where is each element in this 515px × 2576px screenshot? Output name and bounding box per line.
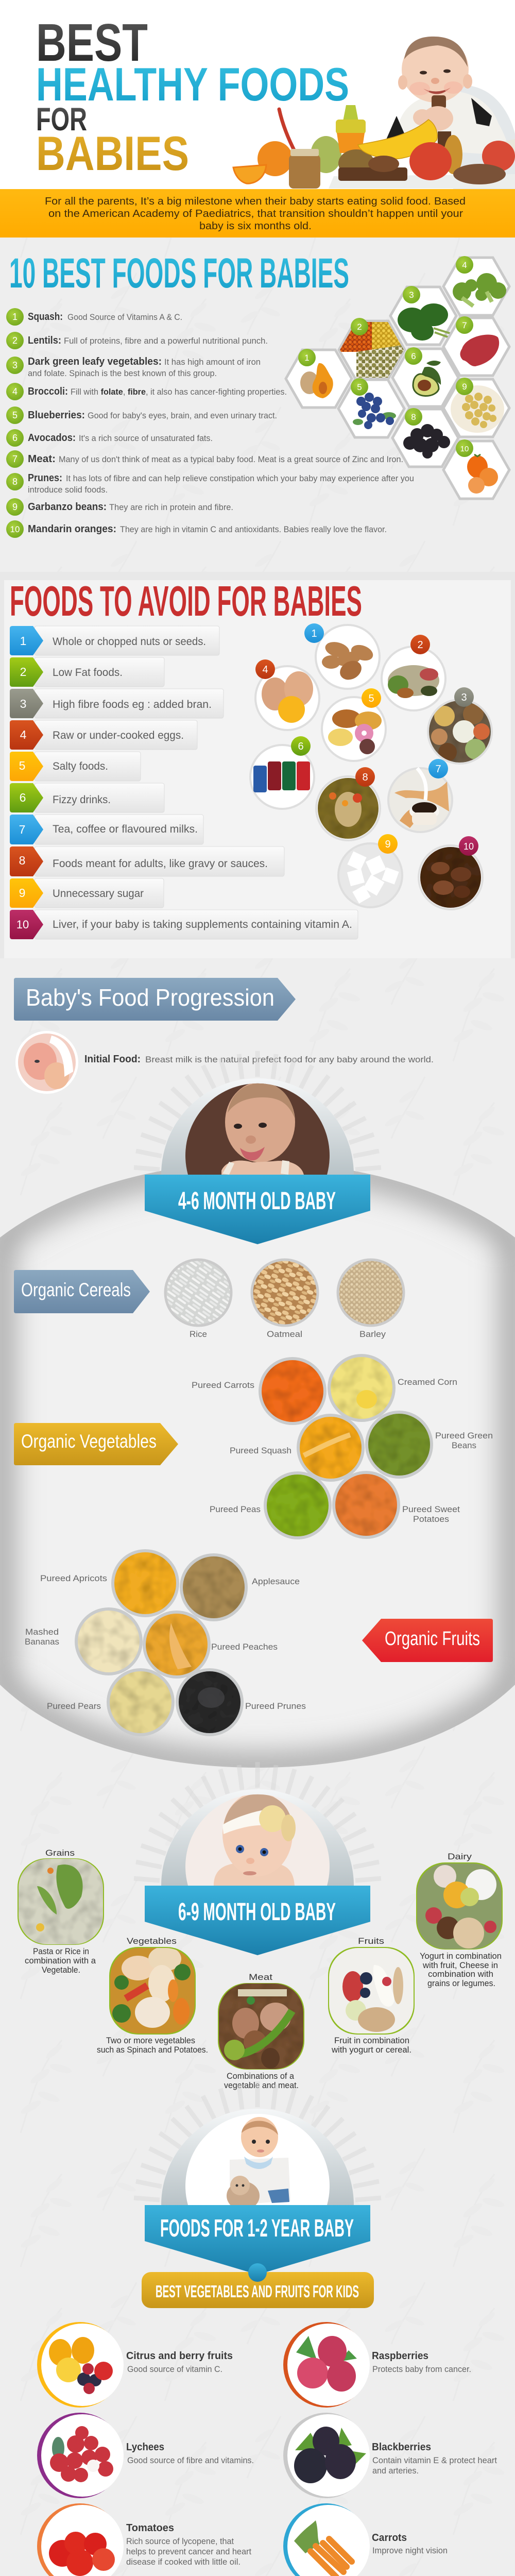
- list item 5: Salty foods.: [53, 760, 108, 772]
- icon: bread slice: [453, 164, 506, 184]
- hexagon 7: meat: 7: [462, 320, 467, 330]
- ribbon: organic cereals: [14, 1270, 150, 1313]
- ribbon: organic cereals: Organic Cereals: [21, 1279, 131, 1300]
- photo: high fibre foods: 3: [461, 692, 467, 703]
- photo: sugar cubes: [338, 834, 402, 907]
- list item 8: introduce solid foods.: [28, 485, 108, 495]
- panel: header: [0, 0, 515, 189]
- list item 3: [6, 356, 261, 378]
- list item 1: [6, 308, 182, 326]
- card: dairy: grains or legumes.: [427, 1978, 495, 1988]
- food: citrus and berry fruits: Good source of vitamin C.: [127, 2364, 222, 2374]
- photo: high fibre foods: [428, 687, 492, 764]
- photo: almonds: [304, 623, 380, 689]
- list item 3: High fibre foods eg : added bran.: [53, 699, 212, 710]
- hexagon 5: blueberries: 5: [357, 382, 362, 392]
- food: tomatoes: [37, 2503, 251, 2576]
- list item 7: Many of us don't think of meat as a typical baby food. Meat is a great source of Zinc and Iron.: [59, 454, 403, 464]
- list item 10: They are high in vitamin C and antioxidants. Babies really love the flavor.: [120, 524, 387, 534]
- hexagon 1: squash: [286, 349, 352, 408]
- list item 8: 8: [19, 854, 25, 867]
- icon: orange: [258, 141, 293, 176]
- list item 4: [10, 720, 197, 750]
- icon: bread: [338, 167, 407, 181]
- list item 6: 6: [20, 791, 26, 804]
- baby 4-6 month medallion: [134, 1051, 381, 1175]
- photo: salty foods: 5: [368, 693, 374, 704]
- list item 1: Good Source of Vitamins A & C.: [67, 312, 182, 322]
- card: meat: [218, 1972, 304, 2090]
- photo: almonds: 1: [311, 628, 317, 639]
- list item 1: 1: [12, 312, 18, 322]
- list item 6: [10, 783, 164, 812]
- list item 7: [10, 815, 203, 844]
- title: BEST: [36, 13, 148, 72]
- icon: baby food jar: [289, 149, 320, 189]
- list item 5: [10, 752, 141, 781]
- ribbon: 4-6 month old baby: 4-6 MONTH OLD BABY: [178, 1188, 336, 1215]
- list item 10: 10: [16, 918, 29, 931]
- photo: low fat foods: 2: [417, 639, 423, 651]
- pureed sweet potatoes: Potatoes: [413, 1514, 449, 1524]
- card: vegetables: such as Spinach and Potatoes.: [97, 2045, 208, 2055]
- photo: barley: Barley: [359, 1329, 386, 1339]
- ribbon: organic vegetables: [14, 1423, 178, 1465]
- list item 1: Whole or chopped nuts or seeds.: [53, 636, 206, 648]
- list item 6: Fizzy drinks.: [53, 794, 111, 806]
- hexagon 8: prunes: [392, 408, 458, 467]
- list item 8: Foods meant for adults, like gravy or sauces.: [53, 858, 268, 870]
- list item 9: 9: [12, 502, 18, 512]
- card: fruits: Fruits: [358, 1936, 384, 1946]
- card: vegetables: Two or more vegetables: [106, 2036, 195, 2045]
- heading ribbon: baby's food progression: Baby's Food Progression: [26, 984, 274, 1011]
- hexagon 5: blueberries: [338, 378, 404, 437]
- list item 8: 8: [12, 477, 18, 487]
- icon: orange slice: [233, 165, 266, 183]
- food: tomatoes: disease if cooked with little oil.: [126, 2557, 241, 2567]
- photo: baby with food: [233, 37, 515, 189]
- pureed carrots: Pureed Carrots: [192, 1380, 254, 1390]
- list item 8: [10, 846, 284, 876]
- heading ribbon: baby's food progression: [14, 978, 296, 1021]
- pureed carrots: [192, 1357, 327, 1425]
- pureed apricots: [40, 1549, 179, 1617]
- card: grains: Grains: [45, 1848, 75, 1858]
- list item 8: [6, 472, 414, 495]
- creamed corn: Creamed Corn: [398, 1377, 457, 1387]
- card: meat: Combinations of a: [227, 2071, 295, 2081]
- panel: 10 best foods: [6, 250, 509, 538]
- list item 3: 3: [20, 697, 26, 710]
- list item 5: Blueberries:: [28, 410, 85, 421]
- panel: intro band: [0, 189, 515, 238]
- list item 1: [10, 626, 219, 655]
- food: tomatoes: Rich source of lycopene, that: [126, 2536, 234, 2546]
- photo: rice: Rice: [190, 1329, 207, 1339]
- list item 9: They are rich in protein and fibre.: [109, 502, 233, 512]
- mashed bananas: [25, 1607, 143, 1675]
- panel: intro band: baby is six months old.: [199, 221, 312, 232]
- list item 2: Lentils:: [28, 335, 61, 346]
- card: dairy: [416, 1852, 503, 1988]
- hexagon 4: broccoli: [443, 256, 509, 315]
- list item 9: Unnecessary sugar: [53, 888, 144, 900]
- food: raspberries: [283, 2322, 471, 2408]
- list item 4: [6, 383, 287, 400]
- food: carrots: Improve night vision: [372, 2546, 448, 2555]
- list item 9: [6, 498, 233, 516]
- list item 7: Tea, coffee or flavoured milks.: [53, 823, 198, 835]
- photo: sugar cubes: 9: [385, 839, 391, 850]
- hexagon 3: leafy greens: 3: [409, 290, 414, 300]
- photo: raw eggs: 4: [262, 664, 268, 675]
- hexagon 7: meat: [443, 316, 509, 376]
- photo: nursing baby: [15, 1031, 78, 1094]
- card: dairy: Dairy: [448, 1852, 472, 1861]
- title: FOR: [36, 101, 87, 138]
- list item 5: 5: [12, 410, 18, 420]
- ribbon: 4-6 month old baby: [145, 1175, 370, 1244]
- banner: best vegetables and fruits for kids: [142, 2263, 374, 2308]
- photo: barley: [338, 1260, 404, 1339]
- list item 4: 4: [20, 728, 27, 741]
- pureed sweet potatoes: [332, 1471, 460, 1539]
- icon: red apple right: [482, 141, 515, 172]
- photo: oatmeal: [252, 1260, 318, 1339]
- card: fruits: Fruit in combination: [334, 2036, 409, 2045]
- ribbon: 6-9 month old baby: [145, 1886, 370, 1955]
- list item 2: [6, 332, 268, 349]
- list item 9: 9: [19, 886, 25, 900]
- list item 2: Full of proteins, fibre and a powerful nutritional punch.: [64, 336, 268, 346]
- list item 10: [6, 520, 387, 538]
- pureed peas: [210, 1471, 332, 1539]
- photo: oatmeal: Oatmeal: [267, 1329, 302, 1339]
- applesauce: Applesauce: [252, 1577, 300, 1586]
- list item 9: Garbanzo beans:: [28, 501, 107, 513]
- initial food: Initial Food:: [84, 1054, 141, 1065]
- list item 10: [10, 910, 358, 939]
- photo: liver: [419, 836, 483, 909]
- title: [36, 13, 349, 180]
- icon: green apple: [311, 136, 341, 173]
- list item 3: It has high amount of iron: [164, 357, 261, 367]
- food: raspberries: Raspberries: [372, 2350, 428, 2362]
- photo: smiling baby: [185, 1082, 330, 1175]
- card: grains: [18, 1848, 104, 1975]
- initial food: [15, 1031, 434, 1094]
- card: fruits: [328, 1936, 415, 2055]
- list item 2: 2: [20, 665, 26, 679]
- ribbon: organic fruits: [362, 1619, 493, 1662]
- food: blackberries: Contain vitamin E & protect heart: [372, 2455, 497, 2465]
- list item 2: [10, 657, 164, 687]
- food: lychees: Lychees: [126, 2442, 164, 2453]
- pureed green beans: [365, 1411, 493, 1479]
- list item 2: Low Fat foods.: [53, 667, 123, 679]
- pureed prunes: Pureed Prunes: [245, 1701, 306, 1711]
- banner: best vegetables and fruits for kids: BEST VEGETABLES AND FRUITS FOR KIDS: [156, 2282, 359, 2301]
- ribbon: 6-9 month old baby: 6-9 MONTH OLD BABY: [178, 1899, 336, 1926]
- card: grains: combination with a: [25, 1956, 96, 1965]
- food: citrus and berry fruits: [37, 2322, 233, 2408]
- photo: fizzy drink cans: 6: [298, 741, 304, 752]
- photo: coffee with milk: 7: [435, 764, 441, 775]
- initial food: Breast milk is the natural prefect food for any baby around the world.: [145, 1055, 434, 1064]
- icon: tray: [329, 174, 515, 189]
- list item 1: Squash:: [28, 311, 63, 323]
- title: HEALTHY FOODS: [36, 59, 349, 111]
- list item 2: 2: [12, 335, 18, 346]
- hexagon 9: garbanzo beans: 9: [462, 382, 467, 392]
- creamed corn: [328, 1354, 457, 1422]
- list item 7: Meat:: [28, 453, 56, 465]
- hexagon 6: avocado: 6: [411, 351, 416, 361]
- card: dairy: Yogurt in combination: [420, 1951, 502, 1961]
- panel: intro band: For all the parents, It’s a big milestone when their baby starts eating solid food. Based: [45, 196, 466, 207]
- panel: big circle background: [0, 1162, 515, 1768]
- pureed pears: [47, 1668, 175, 1736]
- title: BABIES: [36, 126, 189, 180]
- hexagon 6: avocado: [392, 347, 458, 406]
- hexagon 3: leafy greens: [390, 286, 456, 345]
- hexagon 9: garbanzo beans: [443, 378, 509, 437]
- photo: fizzy drink cans: [250, 736, 314, 809]
- list item 9: [10, 878, 164, 908]
- list item 7: 7: [19, 823, 25, 836]
- food: carrots: Carrots: [372, 2532, 407, 2544]
- card: fruits: with yogurt or cereal.: [331, 2045, 411, 2055]
- card: meat: vegetable and meat.: [224, 2080, 299, 2090]
- food: carrots: [283, 2503, 448, 2576]
- applesauce: [180, 1553, 300, 1621]
- photo: coffee with milk: [388, 759, 452, 832]
- list item 8: Prunes:: [28, 472, 62, 484]
- photo: baby with headband: [185, 1792, 330, 1886]
- photo: gravy: 8: [362, 772, 368, 783]
- pureed green beans: Beans: [452, 1440, 476, 1450]
- mashed bananas: Bananas: [25, 1637, 59, 1647]
- list item 5: [6, 406, 277, 424]
- photo: salty foods: [322, 688, 386, 761]
- ribbon: foods for 1-2 year baby: [145, 2205, 370, 2275]
- list item 7: 7: [12, 454, 18, 464]
- list item 10: 10: [10, 524, 20, 534]
- list item 4: Broccoli:: [28, 386, 68, 397]
- pureed green beans: Pureed Green: [435, 1431, 493, 1440]
- mashed bananas: Mashed: [25, 1627, 59, 1637]
- list item 4: Raw or under-cooked eggs.: [53, 730, 184, 741]
- ribbon: foods for 1-2 year baby: FOODS FOR 1-2 YEAR BABY: [160, 2215, 354, 2242]
- food: tomatoes: Tomatoes: [126, 2522, 174, 2534]
- hexagon 8: prunes: 8: [411, 412, 416, 422]
- list item 6: It's a rich source of unsaturated fats.: [79, 433, 213, 443]
- list item 3: [10, 689, 224, 718]
- pureed pears: Pureed Pears: [47, 1701, 101, 1711]
- hexagon 2: lentils: 2: [357, 322, 362, 332]
- ribbon: organic fruits: Organic Fruits: [385, 1628, 480, 1650]
- food: citrus and berry fruits: Citrus and berry fruits: [126, 2350, 233, 2362]
- panel: intro band: on the American Academy of Paediatrics, that transition shouldn’t happen until your: [48, 208, 463, 219]
- food: tomatoes: helps to prevent cancer and heart: [126, 2547, 251, 2556]
- pureed squash: Pureed Squash: [230, 1446, 291, 1455]
- pureed peas: Pureed Peas: [210, 1504, 261, 1514]
- icon: banana: [358, 120, 437, 159]
- list item 3: Dark green leafy vegetables:: [28, 356, 162, 367]
- photo: liver: 10: [464, 841, 474, 852]
- list item 6: Avocados:: [28, 432, 76, 444]
- food: lychees: [37, 2413, 254, 2498]
- food: blackberries: and arteries.: [372, 2466, 419, 2476]
- photo: gravy: [316, 767, 380, 840]
- list item 8: It has lots of fibre and can help relieve constipation which your baby may experience after you: [66, 473, 414, 483]
- card: grains: Pasta or Rice in: [33, 1946, 89, 1956]
- pureed peaches: Pureed Peaches: [211, 1642, 278, 1652]
- pureed peaches: [143, 1611, 278, 1679]
- baby 6-9 month medallion: [134, 1762, 381, 1886]
- card: vegetables: Vegetables: [127, 1936, 177, 1946]
- list item 4: Fill with folate, fibre, it also has cancer-fighting properties.: [71, 387, 287, 397]
- card: vegetables: [97, 1936, 208, 2055]
- food: blackberries: Blackberries: [372, 2442, 431, 2453]
- photo: low fat foods: [382, 635, 445, 710]
- list item 10: Liver, if your baby is taking supplements containing vitamin A.: [53, 919, 352, 930]
- list item 4: 4: [12, 386, 18, 397]
- hexagon 10: mandarin oranges: 10: [460, 445, 469, 453]
- card: meat: Meat: [249, 1972, 272, 1982]
- photo: baby with kitten: [185, 2112, 330, 2210]
- list item 3: 3: [12, 360, 18, 370]
- list item 7: [6, 450, 403, 468]
- list item 1: 1: [20, 634, 26, 648]
- hexagon 10: mandarin oranges: [443, 439, 509, 499]
- food: blackberries: [283, 2413, 497, 2498]
- pureed squash: [230, 1414, 365, 1482]
- list item 6: 6: [12, 433, 18, 443]
- card: dairy: combination with: [428, 1969, 493, 1979]
- hexagon 1: squash: 1: [304, 353, 310, 363]
- food: raspberries: Protects baby from cancer.: [372, 2364, 471, 2374]
- list item 6: [6, 429, 213, 447]
- card: dairy: with fruit, Cheese in: [422, 1960, 498, 1970]
- pureed prunes: [176, 1668, 306, 1736]
- icon: spoon: [279, 109, 296, 153]
- list item 5: Good for baby's eyes, brain, and even urinary tract.: [88, 411, 277, 420]
- baby 1-2 year medallion: [134, 2081, 381, 2210]
- photo: rice: [165, 1260, 231, 1339]
- icon: red apple: [409, 142, 452, 180]
- icon: kiwi: [338, 149, 374, 177]
- card: grains: Vegetable.: [42, 1965, 80, 1975]
- list item 10: Mandarin oranges:: [28, 523, 116, 535]
- icon: sippy cup: [336, 105, 366, 153]
- hexagon 2: lentils: [339, 318, 405, 379]
- list item 3: and folate. Spinach is the best known of this group.: [28, 368, 217, 378]
- photo: raw eggs: [255, 659, 319, 730]
- hexagon 4: broccoli: 4: [462, 260, 467, 270]
- pureed apricots: Pureed Apricots: [40, 1573, 107, 1583]
- ribbon: organic vegetables: Organic Vegetables: [21, 1431, 157, 1452]
- pureed sweet potatoes: Pureed Sweet: [402, 1504, 460, 1514]
- food: lychees: Good source of fibre and vitamins.: [127, 2455, 254, 2465]
- panel: foods to avoid: [0, 572, 515, 958]
- list item 5: 5: [19, 759, 25, 772]
